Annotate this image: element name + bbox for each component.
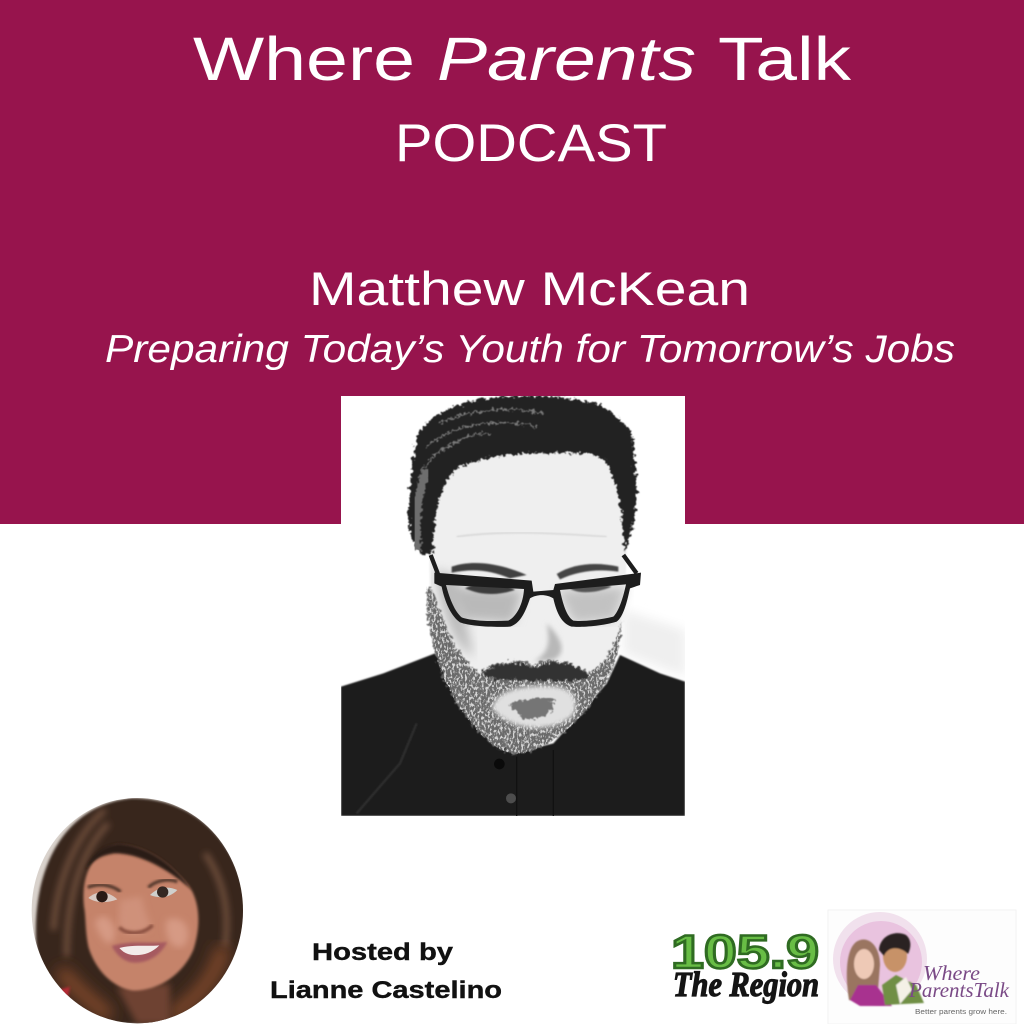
hair — [36, 798, 247, 1024]
beard — [420, 583, 627, 757]
guest photo: Matthew McKean portrait — [341, 396, 685, 816]
red garment accent — [60, 986, 71, 997]
nose shadow — [119, 925, 153, 933]
header text — [105, 25, 955, 371]
face shading — [435, 570, 473, 657]
glasses — [434, 573, 641, 627]
episode title: Preparing Today’s Youth for Tomorrow’s Jobs — [105, 328, 955, 371]
neck — [117, 983, 170, 1024]
logo number: 105.9 — [671, 925, 819, 978]
title: Where Parents Talk: Talk — [718, 25, 852, 93]
logo: 105.9 The Region — [671, 925, 819, 1004]
host photo: Lianne Castelino portrait — [32, 798, 243, 1024]
smile — [112, 942, 167, 963]
logo wordmark: Where — [923, 961, 980, 985]
title: Where Parents Talk: Where — [193, 25, 415, 93]
glasses arms — [431, 555, 637, 575]
title: Where Parents Talk — [193, 25, 852, 93]
eyebrows — [452, 563, 527, 578]
subtitle: PODCAST: PODCAST — [395, 114, 667, 173]
logo: Where Parents Talk: ParentsTalk — [908, 978, 1010, 1002]
hair — [408, 396, 636, 555]
eyes — [88, 893, 117, 902]
panel: crimson header band — [0, 0, 1024, 524]
eyes — [464, 586, 516, 595]
logo: Where Parents Talk — [828, 910, 1016, 1024]
eyebrows — [88, 885, 121, 892]
face — [83, 845, 198, 991]
text: Hosted by: Hosted by — [312, 939, 454, 966]
logo tagline: Better parents grow here. — [915, 1009, 1007, 1016]
neck and face — [429, 451, 627, 748]
shirt — [341, 653, 685, 816]
text: Lianne Castelino: Lianne Castelino — [270, 977, 502, 1004]
shirt buttons — [494, 759, 505, 769]
soft shadow on wall — [624, 614, 684, 672]
logo badge circles — [833, 912, 927, 1006]
guest name: Matthew McKean — [309, 262, 750, 315]
logo couple illustration — [847, 933, 924, 1006]
title: Where Parents Talk: Parents — [437, 25, 696, 93]
host credit — [270, 939, 502, 1004]
